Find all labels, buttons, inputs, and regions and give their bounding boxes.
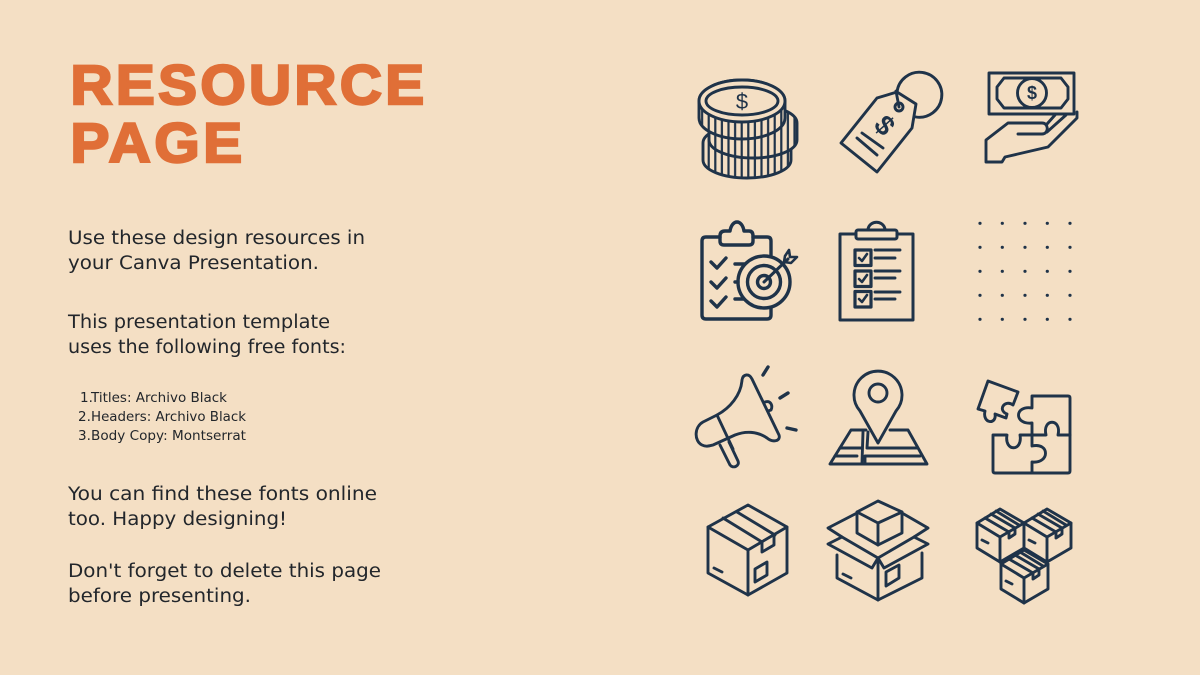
- fonts intro text block: uses the following free fonts:: [68, 337, 346, 358]
- icon: hand holding money: [986, 73, 1077, 162]
- icon: checklist clipboard: [840, 222, 913, 320]
- title: [70, 54, 424, 175]
- numbered font list: 1.: [80, 390, 93, 406]
- title: RESOURCE: [70, 54, 424, 117]
- numbered font list: 3.: [78, 428, 91, 444]
- icon: price tag: $: [868, 109, 902, 142]
- icon: three stacked boxes: [977, 509, 1071, 603]
- icon: map with location pin: [830, 371, 927, 464]
- numbered font list: Body Copy: Montserrat: [91, 428, 246, 444]
- find fonts text block: You can find these fonts online: [67, 484, 377, 505]
- icon: megaphone: [696, 367, 796, 467]
- find fonts text block: too. Happy designing!: [68, 509, 287, 530]
- left box: [977, 509, 1024, 562]
- fonts intro text block: [67, 312, 346, 358]
- icon: closed cardboard box: [708, 505, 787, 595]
- title: PAGE: [70, 112, 242, 175]
- intro text block: Use these design resources in: [68, 228, 365, 249]
- numbered font list: [78, 390, 246, 444]
- intro text block: your Canva Presentation.: [68, 253, 319, 274]
- delete reminder text block: before presenting.: [68, 586, 251, 607]
- right box: [1024, 509, 1071, 562]
- numbered font list: 2.: [78, 409, 91, 425]
- decorative dot grid: [978, 222, 1072, 321]
- delete reminder text block: Don't forget to delete this page: [68, 561, 381, 582]
- icon: open box with small box: [828, 501, 928, 600]
- numbered font list: Titles: Archivo Black: [90, 390, 227, 406]
- icon: hand holding money: $: [1027, 83, 1037, 103]
- find fonts text block: [67, 484, 377, 530]
- icon: price tag: [841, 72, 942, 172]
- fonts intro text block: This presentation template: [67, 312, 330, 333]
- numbered font list: Headers: Archivo Black: [91, 409, 246, 425]
- icon: clipboard with target: [702, 222, 797, 319]
- icon: coin stack: [699, 80, 797, 178]
- intro text block: [68, 228, 365, 274]
- bottom box: [1001, 550, 1048, 603]
- icon: jigsaw puzzle: [978, 381, 1070, 473]
- delete reminder text block: [68, 561, 381, 607]
- icon: coin stack: $: [736, 89, 748, 114]
